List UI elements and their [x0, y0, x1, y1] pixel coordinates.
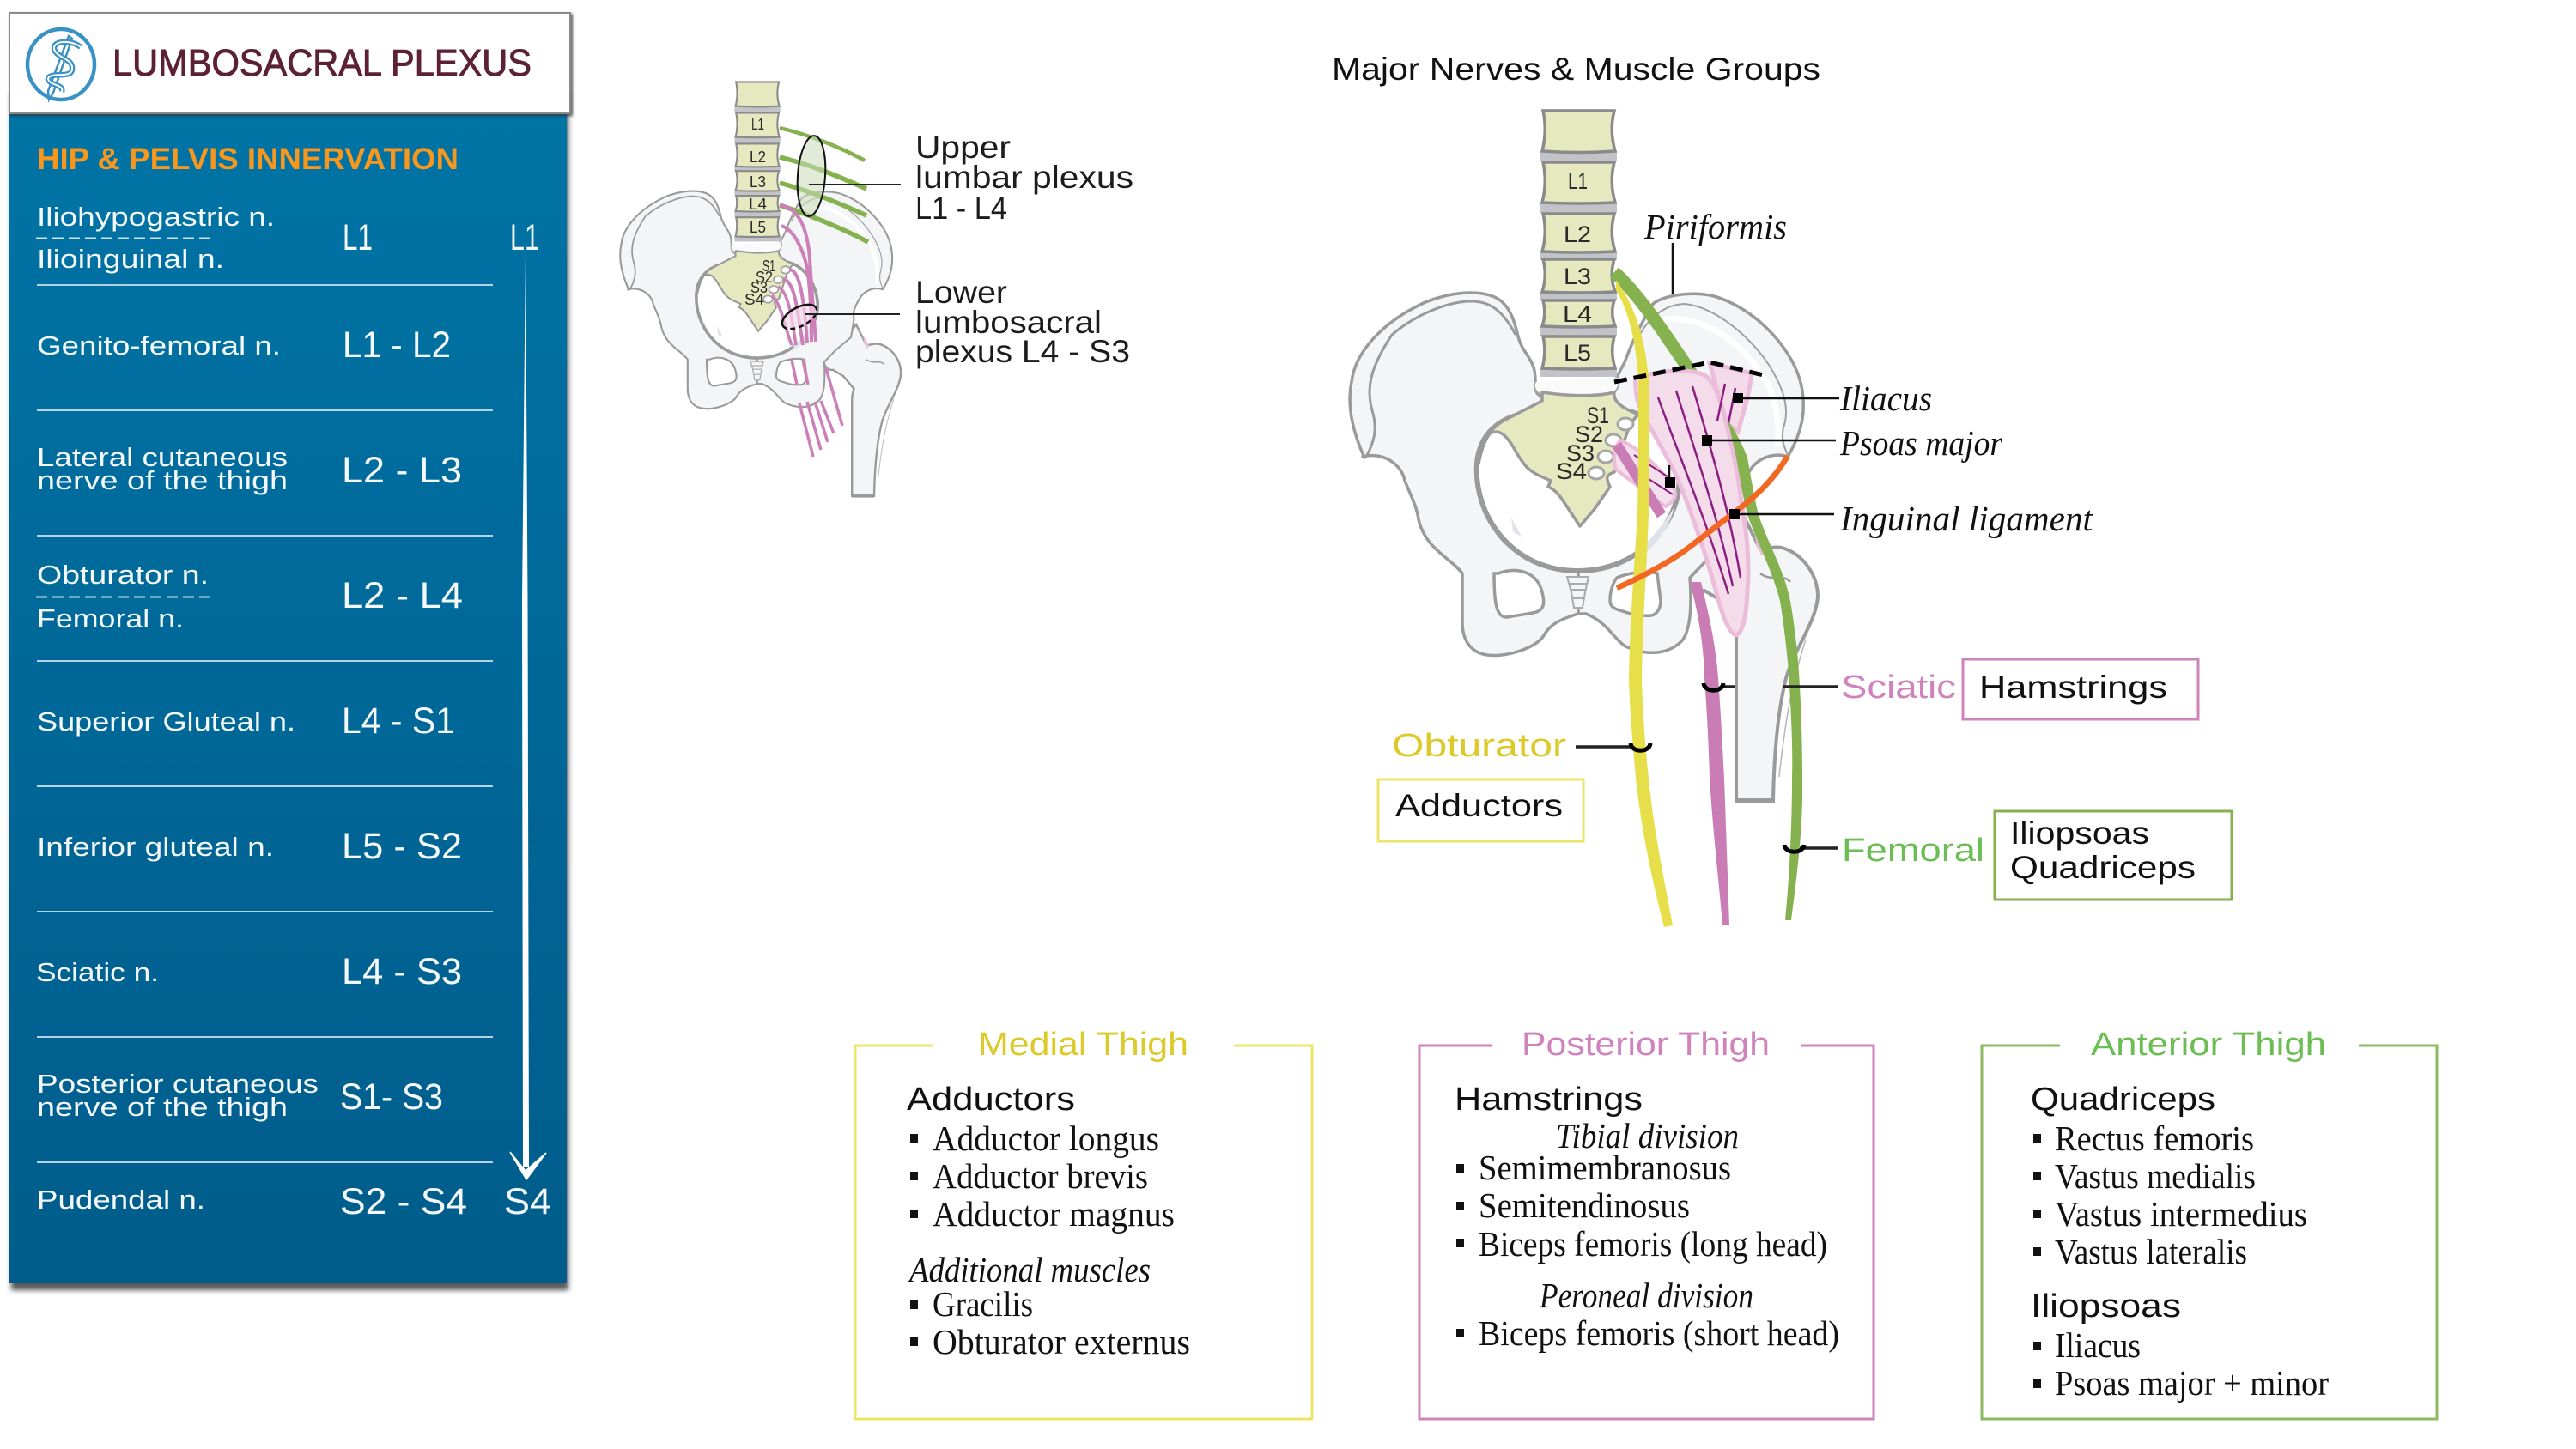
row: iliohypogastric and ilioinguinal: Ilioinguinal n.	[37, 244, 224, 274]
title banner	[9, 13, 570, 113]
heading: medial thigh: Medial Thigh	[978, 1027, 1188, 1063]
row: genito-femoral: Genito-femoral n.	[37, 330, 281, 361]
list: quadriceps and iliopsoas	[2031, 1082, 2329, 1403]
list: hamstrings: Tibial division	[1556, 1116, 1739, 1155]
callout: lower lumbosacral plexus	[805, 275, 1130, 369]
vertebra labels: large: L3	[1564, 264, 1591, 289]
row: iliohypogastric and ilioinguinal	[36, 202, 373, 274]
row: genito-femoral: L1 - L2	[343, 324, 451, 366]
femoral nerve: lower segment	[1728, 421, 1802, 920]
row: obturator and femoral: Obturator n.	[37, 560, 209, 590]
list: adductors: Adductor magnus	[933, 1194, 1175, 1234]
list: hamstrings	[1455, 1082, 1839, 1353]
row: lateral cutaneous nerve	[37, 442, 462, 495]
list: quadriceps and iliopsoas: Vastus intermedius	[2055, 1194, 2307, 1234]
row: superior gluteal: L4 - S1	[342, 700, 455, 742]
row: lateral cutaneous nerve: nerve of the thigh	[37, 465, 288, 495]
list: adductors: Adductor longus	[933, 1119, 1159, 1158]
row: pudendal: Pudendal n.	[37, 1185, 205, 1215]
row: obturator and femoral: L2 - L4	[342, 575, 463, 616]
callout: sciatic to hamstrings	[1704, 659, 2198, 719]
row: obturator and femoral	[36, 560, 463, 634]
label: inguinal ligament: Inguinal ligament	[1839, 499, 2094, 538]
list: hamstrings: Peroneal division	[1539, 1276, 1753, 1315]
row: obturator and femoral: Femoral n.	[37, 603, 184, 634]
heading: posterior thigh: Posterior Thigh	[1522, 1027, 1770, 1063]
piriformis muscle	[1614, 440, 1675, 506]
ellipse: upper lumbar plexus	[795, 135, 828, 217]
vertebra labels: small: S4	[744, 291, 764, 308]
heading: major nerves and muscle groups: Major Nerves & Muscle Groups	[1332, 52, 1820, 87]
row: posterior cutaneous: nerve of the thigh	[37, 1092, 288, 1122]
callout: obturator to adductors	[1378, 728, 1650, 841]
femoral nerve: upper segment	[1614, 272, 1692, 373]
row: superior gluteal	[37, 700, 455, 742]
row: lateral cutaneous nerve: L2 - L3	[342, 450, 462, 491]
vertebra labels: large: L4	[1563, 301, 1592, 327]
vertebra labels: large: L1	[1568, 168, 1588, 194]
vertebra labels: small: L1	[751, 116, 764, 133]
list: adductors: Gracilis	[933, 1284, 1033, 1324]
panel: medial thigh	[855, 1027, 1312, 1419]
arrow: L1 to S4: L1	[510, 217, 539, 258]
callout: lower lumbosacral plexus: lumbosacral	[915, 305, 1102, 340]
list: adductors: Adductors	[907, 1082, 1075, 1118]
nerves: lower lumbosacral plexus	[772, 205, 842, 457]
callout: lower lumbosacral plexus: Lower	[915, 275, 1007, 310]
callout: femoral to iliopsoas and quadriceps	[1784, 811, 2232, 900]
row: sciatic	[36, 951, 462, 992]
nerves: upper lumbar plexus	[780, 128, 868, 242]
callout: upper lumbar plexus: lumbar plexus	[915, 160, 1133, 195]
list: hamstrings: Semimembranosus	[1479, 1148, 1731, 1187]
row: iliohypogastric and ilioinguinal: Iliohypogastric n.	[37, 202, 275, 232]
arrow: L1 to S4: S4	[504, 1181, 551, 1222]
list: hamstrings: Biceps femoris (short head)	[1479, 1313, 1839, 1353]
list: hamstrings: Biceps femoris (long head)	[1479, 1224, 1827, 1264]
list: quadriceps and iliopsoas: Quadriceps	[2031, 1082, 2215, 1118]
list: hamstrings: Semitendinosus	[1479, 1185, 1690, 1225]
pelvic brim dashed line	[1614, 362, 1764, 382]
row: posterior cutaneous: S1- S3	[340, 1076, 443, 1118]
left panel: hip and pelvis innervation	[9, 86, 567, 1283]
arrow: L1 to S4	[504, 217, 551, 1222]
vertebra labels: large: S4	[1556, 458, 1587, 484]
label: piriformis: Piriformis	[1643, 207, 1787, 246]
callout: femoral to iliopsoas and quadriceps: Femoral	[1842, 833, 1984, 869]
vertebra labels: large: S2	[1575, 421, 1603, 447]
callout: obturator to adductors: Obturator	[1392, 728, 1566, 764]
list: adductors: Adductor brevis	[933, 1156, 1148, 1196]
row: genito-femoral	[37, 324, 451, 366]
callout: lower lumbosacral plexus: plexus L4 - S3	[915, 334, 1130, 369]
row: pudendal: S2 - S4	[340, 1181, 467, 1222]
vertebra labels: small: S1	[762, 258, 775, 275]
heading: anterior thigh: Anterior Thigh	[2091, 1027, 2326, 1063]
large anatomy diagram	[1350, 111, 2232, 927]
row: pudendal	[37, 1181, 467, 1222]
label: inguinal ligament	[1729, 499, 2094, 538]
panel heading: HIP & PELVIS INNERVATION	[37, 142, 459, 176]
list: quadriceps and iliopsoas: Iliacus	[2055, 1325, 2141, 1365]
vertebra labels: small: L4	[749, 196, 767, 213]
row: superior gluteal: Superior Gluteal n.	[37, 706, 295, 737]
callout: sciatic to hamstrings: Sciatic	[1841, 670, 1956, 706]
row: inferior gluteal: L5 - S2	[342, 826, 462, 867]
callout: femoral to iliopsoas and quadriceps: Quadriceps	[2010, 850, 2196, 885]
pelvis: small	[620, 82, 901, 496]
panel: posterior thigh	[1419, 1027, 1874, 1419]
row: inferior gluteal	[37, 826, 462, 867]
vertebra labels: small: S3	[750, 279, 768, 296]
psoas major muscle	[1636, 371, 1748, 635]
callout: upper lumbar plexus: Upper	[915, 130, 1011, 165]
small overview diagram	[620, 82, 1133, 496]
main title: LUMBOSACRAL PLEXUS	[112, 42, 532, 84]
vertebra labels: small: S2	[756, 269, 773, 286]
row: sciatic: Sciatic n.	[36, 957, 159, 987]
list: quadriceps and iliopsoas: Vastus lateralis	[2055, 1232, 2247, 1271]
inguinal ligament	[1617, 456, 1788, 588]
panel: anterior thigh	[1982, 1027, 2437, 1419]
callout: femoral to iliopsoas and quadriceps: Iliopsoas	[2010, 815, 2149, 851]
vertebra labels: large: S1	[1587, 403, 1609, 428]
label: iliacus	[1733, 379, 1932, 418]
list: quadriceps and iliopsoas: Psoas major + minor	[2055, 1363, 2329, 1403]
sciatic nerve: thigh segment	[1690, 582, 1729, 925]
list: adductors: Obturator externus	[933, 1322, 1190, 1361]
vertebra labels: large	[1556, 168, 1609, 484]
row: sciatic: L4 - S3	[342, 951, 462, 992]
list: adductors: Additional muscles	[907, 1250, 1151, 1289]
callout: obturator to adductors: Adductors	[1395, 788, 1563, 823]
vertebra labels: small	[744, 116, 775, 308]
iliacus muscle	[1710, 363, 1752, 432]
vertebra labels: large: S3	[1566, 440, 1595, 466]
list: hamstrings: Hamstrings	[1455, 1082, 1643, 1118]
callout: upper lumbar plexus	[809, 130, 1133, 226]
ellipse: lower lumbosacral plexus	[778, 300, 821, 334]
vertebra labels: small: L3	[750, 173, 766, 191]
row: posterior cutaneous: Posterior cutaneous	[37, 1069, 319, 1099]
callout: sciatic to hamstrings: Hamstrings	[1979, 670, 2167, 705]
list: adductors	[907, 1082, 1190, 1361]
callout: upper lumbar plexus: L1 - L4	[915, 191, 1007, 226]
icon: rod of asclepius	[27, 29, 94, 100]
list: quadriceps and iliopsoas: Vastus medialis	[2055, 1156, 2256, 1196]
list: quadriceps and iliopsoas: Rectus femoris	[2055, 1119, 2254, 1158]
obturator nerve	[1616, 280, 1673, 927]
label: psoas major	[1702, 423, 2003, 463]
pelvis: large	[1350, 111, 1818, 801]
label: iliacus: Iliacus	[1839, 379, 1932, 418]
vertebra labels: small: L5	[750, 219, 766, 236]
vertebra labels: large: L2	[1564, 221, 1591, 247]
list: quadriceps and iliopsoas: Iliopsoas	[2031, 1288, 2181, 1325]
vertebra labels: small: L2	[750, 149, 766, 166]
row: lateral cutaneous nerve: Lateral cutaneous	[37, 442, 288, 472]
vertebra labels: large: L5	[1564, 340, 1591, 366]
label: piriformis	[1643, 207, 1787, 488]
label: psoas major: Psoas major	[1839, 423, 2003, 463]
sciatic nerve: pelvic segment	[1617, 445, 1662, 515]
row: inferior gluteal: Inferior gluteal n.	[37, 832, 274, 862]
row: iliohypogastric and ilioinguinal: L1	[343, 217, 373, 258]
row: posterior cutaneous	[37, 1069, 443, 1122]
